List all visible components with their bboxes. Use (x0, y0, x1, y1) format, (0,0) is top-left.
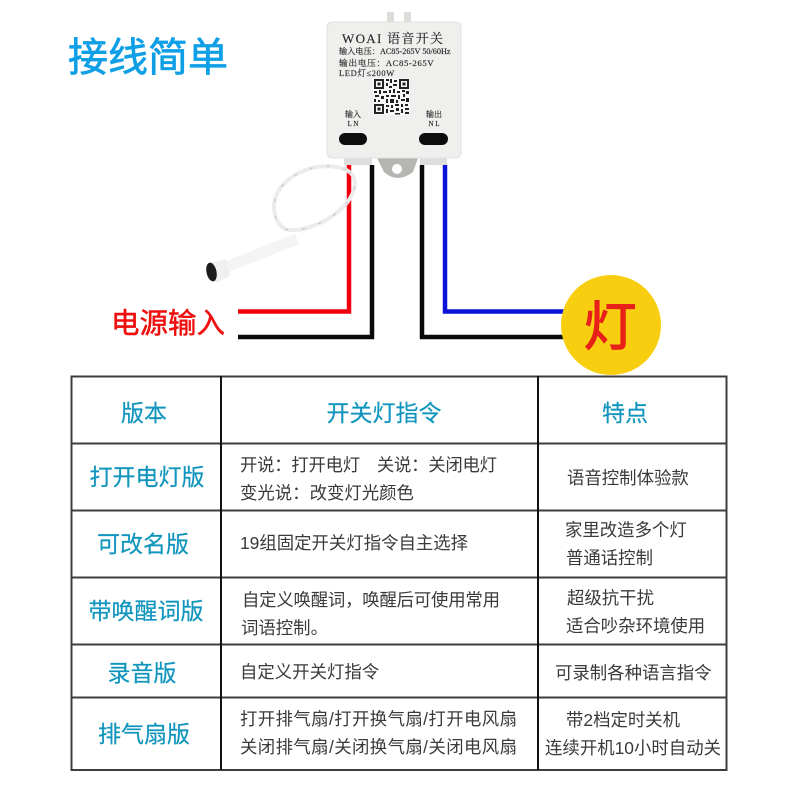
table header: 特点 (602, 400, 648, 426)
row: 带唤醒词版: 适合吵杂环境使用 (566, 616, 705, 636)
label text: WOAI 语音开关 (342, 31, 444, 46)
row: 带唤醒词版 (88, 588, 705, 638)
row: 录音版: 录音版 (108, 660, 176, 686)
row: 录音版 (108, 660, 712, 686)
device: voice switch module: 输入电压：AC85-265V 50/60Hz (339, 46, 451, 56)
label: power input: 电源输入 (111, 308, 225, 340)
row: 排气扇版: 连续开机10小时自动关 (545, 738, 721, 758)
row: 打开电灯版: 打开电灯版 (90, 464, 204, 490)
row: 带唤醒词版: 自定义唤醒词，唤醒后可使用常用 (242, 590, 500, 610)
device: voice switch module: LED灯≤200W (339, 68, 395, 78)
table header: 版本 (121, 400, 167, 426)
row: 打开电灯版: 变光说：改变灯光颜色 (240, 483, 414, 503)
terminal blocks (344, 156, 447, 165)
row: 可改名版: 19组固定开关灯指令自主选择 (240, 533, 468, 553)
wires (238, 165, 570, 337)
device: voice switch module (327, 12, 461, 178)
row: 带唤醒词版: 词语控制。 (241, 618, 328, 638)
output label: 输出 (426, 109, 442, 119)
terminal slots (339, 133, 367, 145)
table (71, 376, 727, 770)
icon: voice microphone with looped cable (205, 166, 355, 283)
row: 可改名版: 家里改造多个灯 (565, 520, 687, 540)
case (327, 22, 461, 158)
device: voice switch module: N L (428, 120, 440, 128)
row: 带唤醒词版: 超级抗干扰 (567, 588, 654, 608)
row: 排气扇版: 打开排气扇/打开换气扇/打开电风扇 (240, 709, 517, 729)
row: 录音版: 可录制各种语言指令 (555, 663, 712, 683)
row: 可改名版: 普通话控制 (566, 548, 653, 568)
row: 可改名版 (97, 520, 687, 568)
row: 打开电灯版: 开说：打开电灯 关说：关闭电灯 (240, 455, 497, 475)
device: voice switch module: 输出电压：AC85-265V (339, 57, 434, 68)
table header (121, 400, 648, 426)
table header: 开关灯指令 (326, 400, 442, 426)
row: 录音版: 自定义开关灯指令 (240, 662, 379, 682)
table grid (71, 376, 727, 770)
input label: 输入 (345, 109, 361, 119)
title: 接线简单 (68, 36, 228, 80)
row: 可改名版: 可改名版 (97, 531, 189, 557)
mounting lug (377, 158, 418, 178)
row: 排气扇版 (98, 709, 721, 758)
icon: lamp circle (561, 275, 661, 375)
row: 排气扇版: 关闭排气扇/关闭换气扇/关闭电风扇 (240, 737, 517, 757)
top tabs (387, 12, 411, 23)
row: 排气扇版: 带2档定时关机 (566, 710, 681, 730)
QR code (373, 78, 410, 115)
device: voice switch module: L N (348, 120, 358, 128)
row: 打开电灯版: 语音控制体验款 (567, 468, 689, 488)
row: 打开电灯版 (90, 455, 689, 503)
row: 带唤醒词版: 带唤醒词版 (88, 598, 204, 624)
icon: lamp circle: 灯 (584, 298, 636, 357)
row: 排气扇版: 排气扇版 (98, 721, 190, 747)
